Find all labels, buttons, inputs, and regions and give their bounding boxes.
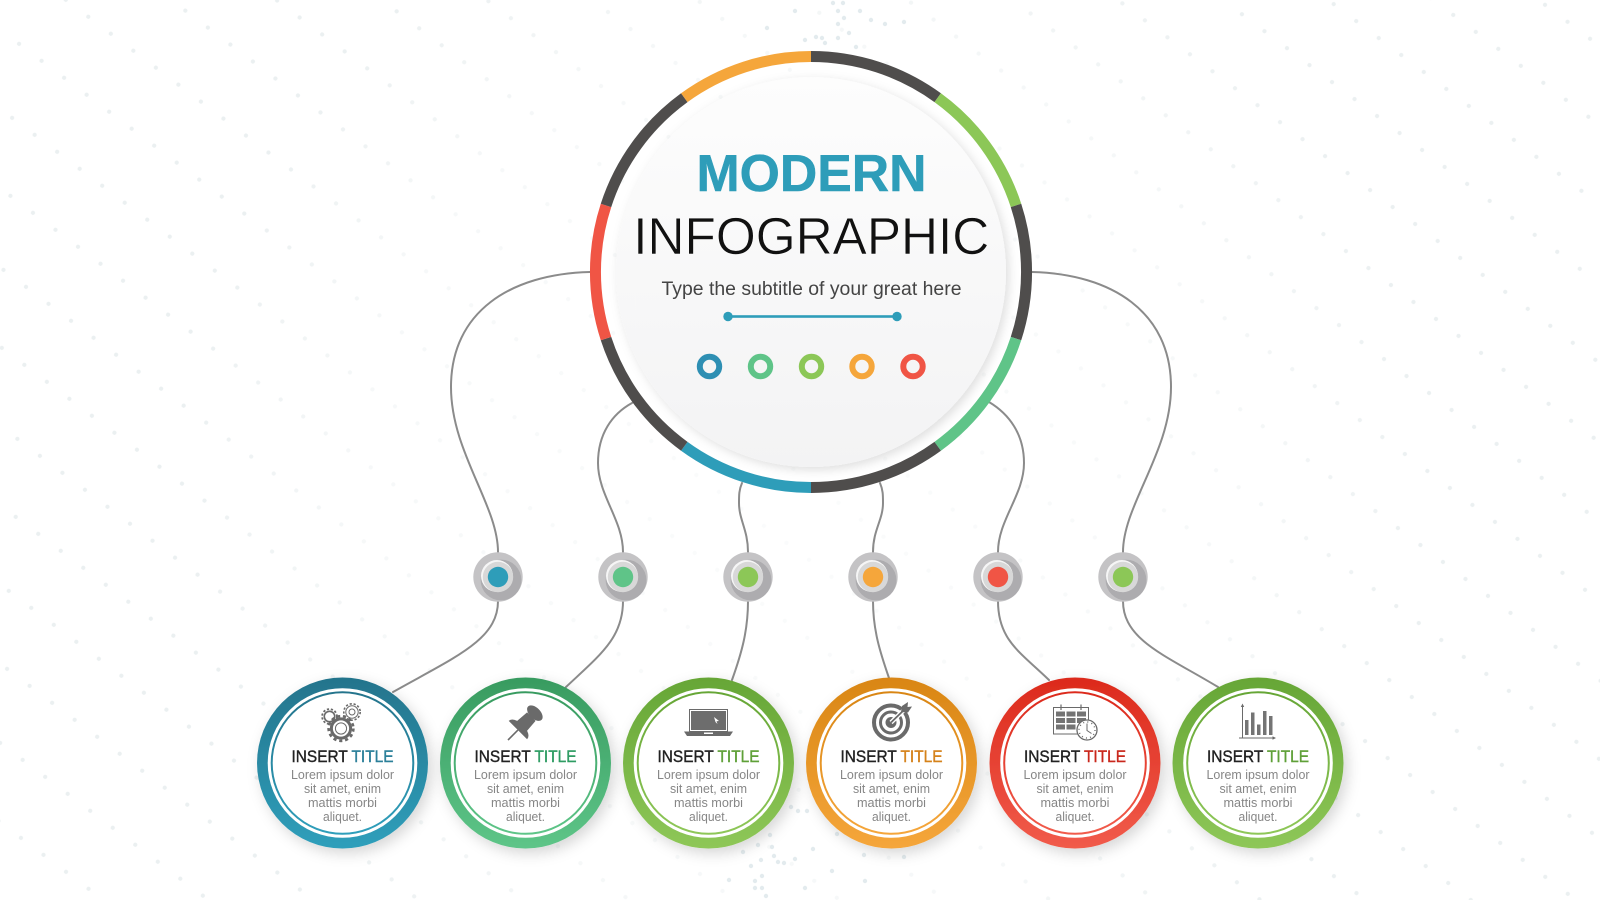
panel: card 6 lime [1172,678,1344,848]
body text: Lorem ipsum dolor [657,767,761,782]
node: blue [473,552,523,602]
body text: sit amet, enim [853,781,930,796]
node: red [973,552,1023,602]
heading: INSERT TITLE [1024,747,1126,766]
subtitle: Type the subtitle of your great here [662,279,962,300]
panel: card 5 red [990,678,1160,848]
icon: gears [322,704,360,741]
body text: sit amet, enim [487,781,564,796]
body text [474,767,578,824]
body text [840,767,944,824]
body text: aliquet. [1238,809,1278,824]
heading: INSERT TITLE [292,747,394,766]
panel: card 4 orange [806,678,977,848]
node: orange [848,552,898,602]
node: lime [723,552,773,602]
title: INFOGRAPHIC: INFOGRAPHIC [633,208,989,266]
body text [1024,767,1127,824]
body text: sit amet, enim [1220,781,1296,796]
body text: mattis morbi [1040,795,1110,810]
body text: aliquet. [872,809,911,824]
body text: Lorem ipsum dolor [1024,767,1127,782]
icon: laptop [684,710,733,736]
panel: card 2 green [440,678,611,848]
body text: sit amet, enim [670,781,747,796]
body text: Lorem ipsum dolor [840,767,944,782]
panel: card 1 blue [257,678,428,848]
segmented outer ring [595,56,1027,488]
body text: mattis morbi [674,795,743,810]
body text: sit amet, enim [1036,781,1114,796]
body text: mattis morbi [857,795,926,810]
heading: INSERT TITLE [474,747,576,766]
panel: central circle [595,56,1027,488]
body text: aliquet. [689,809,728,824]
connector lines [393,272,1218,692]
body text: Lorem ipsum dolor [474,767,578,782]
body text [1206,767,1310,824]
colour ring dots [700,357,923,376]
body text [657,767,761,824]
icon: push pin [499,700,548,749]
body text: Lorem ipsum dolor [291,767,395,782]
icon: target [874,702,912,740]
node: lime 2 [1098,552,1148,602]
heading: INSERT TITLE [840,747,942,766]
divider line with end dots [723,312,902,321]
body text: mattis morbi [308,795,377,810]
body text: aliquet. [1056,809,1094,824]
panel: card 3 lime [623,678,794,848]
icon: calendar and clock [1054,704,1097,740]
icon: bar chart [1239,704,1276,740]
body text: aliquet. [323,809,362,824]
body text: sit amet, enim [304,781,381,796]
heading: INSERT TITLE [658,747,760,766]
inner disc [616,77,1006,467]
node: green [598,552,648,602]
body text [291,767,395,824]
heading: INSERT TITLE [1207,747,1309,766]
body text: aliquet. [506,809,545,824]
body text: mattis morbi [1224,795,1293,810]
title: MODERN: MODERN [696,145,926,203]
body text: Lorem ipsum dolor [1206,767,1310,782]
body text: mattis morbi [491,795,560,810]
